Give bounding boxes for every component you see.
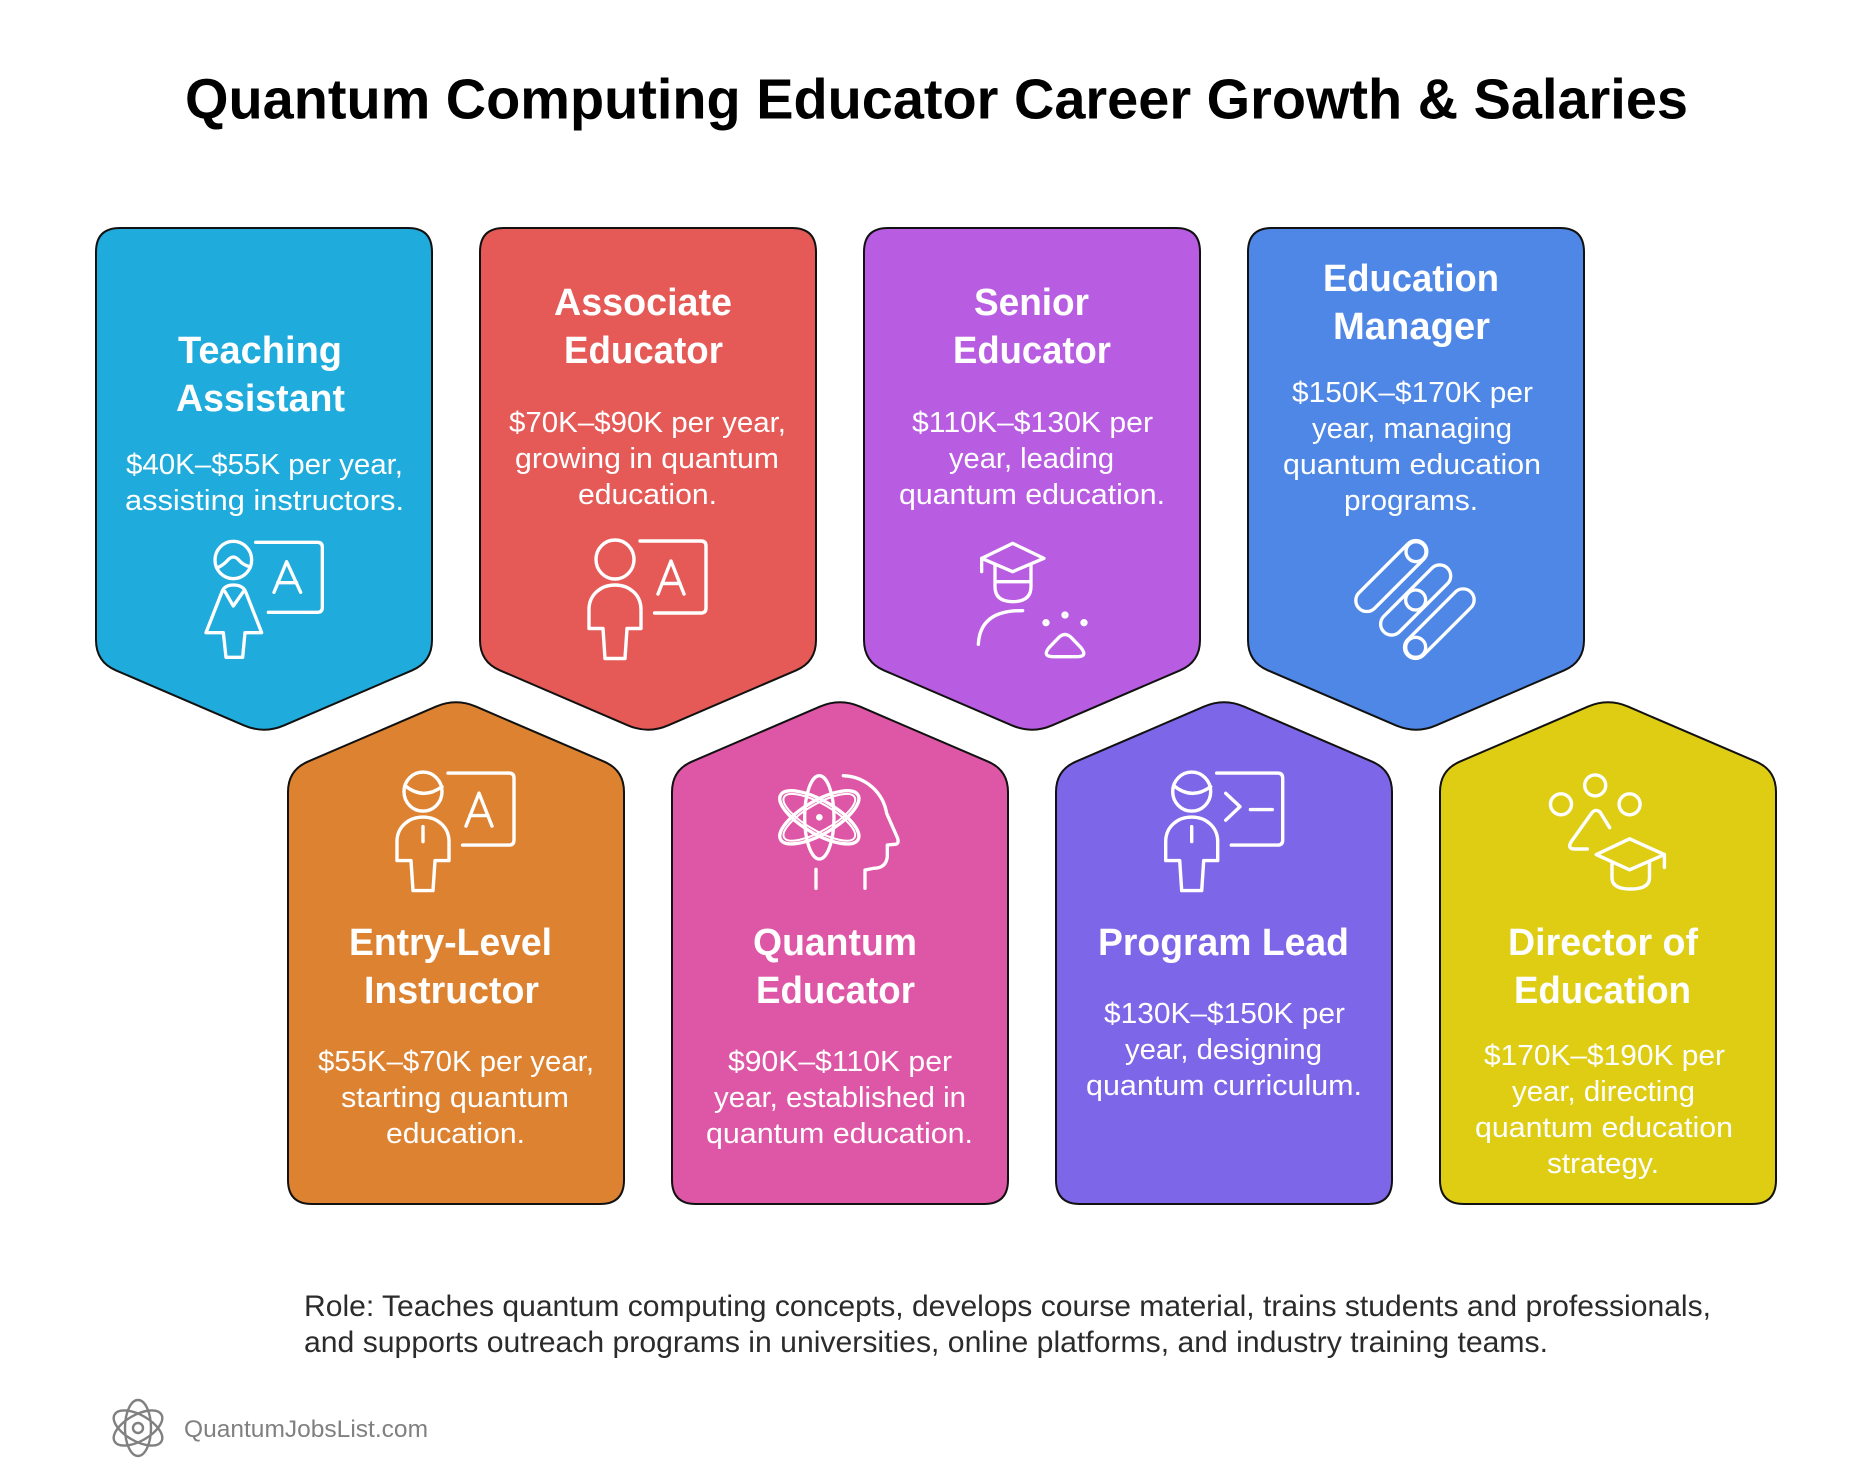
text: Quantum Educator salary: $90K–$110K per — [728, 1046, 953, 1078]
text: role description — [304, 1290, 1711, 1359]
icon: instructor with board — [397, 772, 514, 891]
heading: Director of Education — [1508, 922, 1698, 1012]
heading: Quantum Educator — [753, 922, 917, 1012]
text: Program Lead salary: quantum curriculum. — [1086, 1070, 1362, 1102]
panel: Entry-Level Instructor — [288, 702, 624, 1204]
text: Program Lead salary — [1086, 998, 1362, 1102]
heading: Associate Educator: Associate — [554, 282, 732, 324]
text: Director of Education salary: $170K–$190K per — [1484, 1040, 1726, 1072]
heading: Education Manager: Manager — [1333, 306, 1490, 348]
text: Teaching Assistant salary — [125, 449, 404, 517]
text: Senior Educator salary: $110K–$130K per — [912, 407, 1154, 439]
heading: Associate Educator — [554, 282, 732, 372]
text: Quantum Educator salary: year, established in — [714, 1082, 966, 1114]
text: Associate Educator salary: growing in quantum — [515, 443, 779, 475]
heading: Education Manager — [1323, 258, 1499, 348]
icon: person with board — [589, 540, 706, 658]
text: Quantum Educator salary: quantum education. — [706, 1118, 973, 1150]
text: Senior Educator salary: year, leading — [949, 443, 1114, 475]
icon: teacher with board — [206, 541, 322, 657]
heading: Director of Education: Director of — [1508, 922, 1698, 964]
text: Entry-Level Instructor salary: $55K–$70K per year, — [318, 1046, 594, 1078]
text: Entry-Level Instructor salary: starting quantum — [341, 1082, 569, 1114]
text: Education Manager salary: programs. — [1344, 485, 1478, 517]
heading: Teaching Assistant — [176, 330, 345, 420]
icon: scrolls — [1351, 536, 1479, 663]
panel: Program Lead — [1056, 702, 1392, 1204]
heading: Associate Educator: Educator — [564, 330, 723, 372]
text: Education Manager salary: $150K–$170K per — [1292, 377, 1534, 409]
heading: Entry-Level Instructor: Instructor — [364, 970, 539, 1012]
panel: Associate Educator — [480, 228, 816, 730]
panel: Quantum Educator — [672, 702, 1008, 1204]
panel: Teaching Assistant — [96, 228, 432, 730]
panel: Senior Educator — [864, 228, 1200, 730]
text: Program Lead salary: year, designing — [1125, 1034, 1322, 1066]
footer logo: atom — [108, 1400, 168, 1456]
text: role description: and supports outreach programs in universities, online platforms, and industry training teams. — [304, 1326, 1548, 1359]
text: Director of Education salary — [1475, 1040, 1733, 1180]
text: Program Lead salary: $130K–$150K per — [1104, 998, 1346, 1030]
text: Associate Educator salary: education. — [578, 479, 717, 511]
heading: Teaching Assistant: Assistant — [176, 378, 345, 420]
icon: graduate with paw dots — [978, 543, 1086, 657]
heading: Senior Educator — [953, 282, 1111, 372]
text: Entry-Level Instructor salary: education. — [386, 1118, 525, 1150]
heading: Quantum Educator: Quantum — [753, 922, 917, 964]
text: Associate Educator salary — [509, 407, 786, 511]
heading: Teaching Assistant: Teaching — [178, 330, 342, 372]
title: Quantum Computing Educator Career Growth & Salaries — [185, 68, 1688, 132]
text: Education Manager salary — [1283, 377, 1541, 517]
heading: Entry-Level Instructor — [349, 922, 552, 1012]
heading: Program Lead: Program Lead — [1098, 922, 1349, 964]
text: Director of Education salary: year, directing — [1512, 1076, 1695, 1108]
text: Entry-Level Instructor salary — [318, 1046, 594, 1150]
text: role description: Role: Teaches quantum computing concepts, develops course material, trains students and professionals, — [304, 1290, 1711, 1323]
text: Teaching Assistant salary: assisting instructors. — [125, 485, 404, 517]
text: Senior Educator salary: quantum education. — [899, 479, 1165, 511]
text: Associate Educator salary: $70K–$90K per year, — [509, 407, 786, 439]
heading: Senior Educator: Educator — [953, 330, 1111, 372]
panel: Director of Education — [1440, 702, 1776, 1204]
icon: atom in head — [772, 776, 898, 888]
heading: Director of Education: Education — [1514, 970, 1691, 1012]
heading: Quantum Educator: Educator — [756, 970, 915, 1012]
heading: Senior Educator: Senior — [974, 282, 1089, 324]
footer text: QuantumJobsList.com — [184, 1416, 428, 1443]
text: Quantum Educator salary — [706, 1046, 973, 1150]
text: Director of Education salary: strategy. — [1547, 1148, 1659, 1180]
text: Education Manager salary: quantum education — [1283, 449, 1541, 481]
text: Senior Educator salary — [899, 407, 1165, 511]
panel: Education Manager — [1248, 228, 1584, 730]
heading: Education Manager: Education — [1323, 258, 1499, 300]
text: Teaching Assistant salary: $40K–$55K per year, — [126, 449, 403, 481]
icon: person with terminal board — [1166, 772, 1283, 891]
text: Education Manager salary: year, managing — [1312, 413, 1512, 445]
heading: Entry-Level Instructor: Entry-Level — [349, 922, 552, 964]
text: Director of Education salary: quantum education — [1475, 1112, 1733, 1144]
icon: graduation cap with circles — [1550, 775, 1664, 889]
